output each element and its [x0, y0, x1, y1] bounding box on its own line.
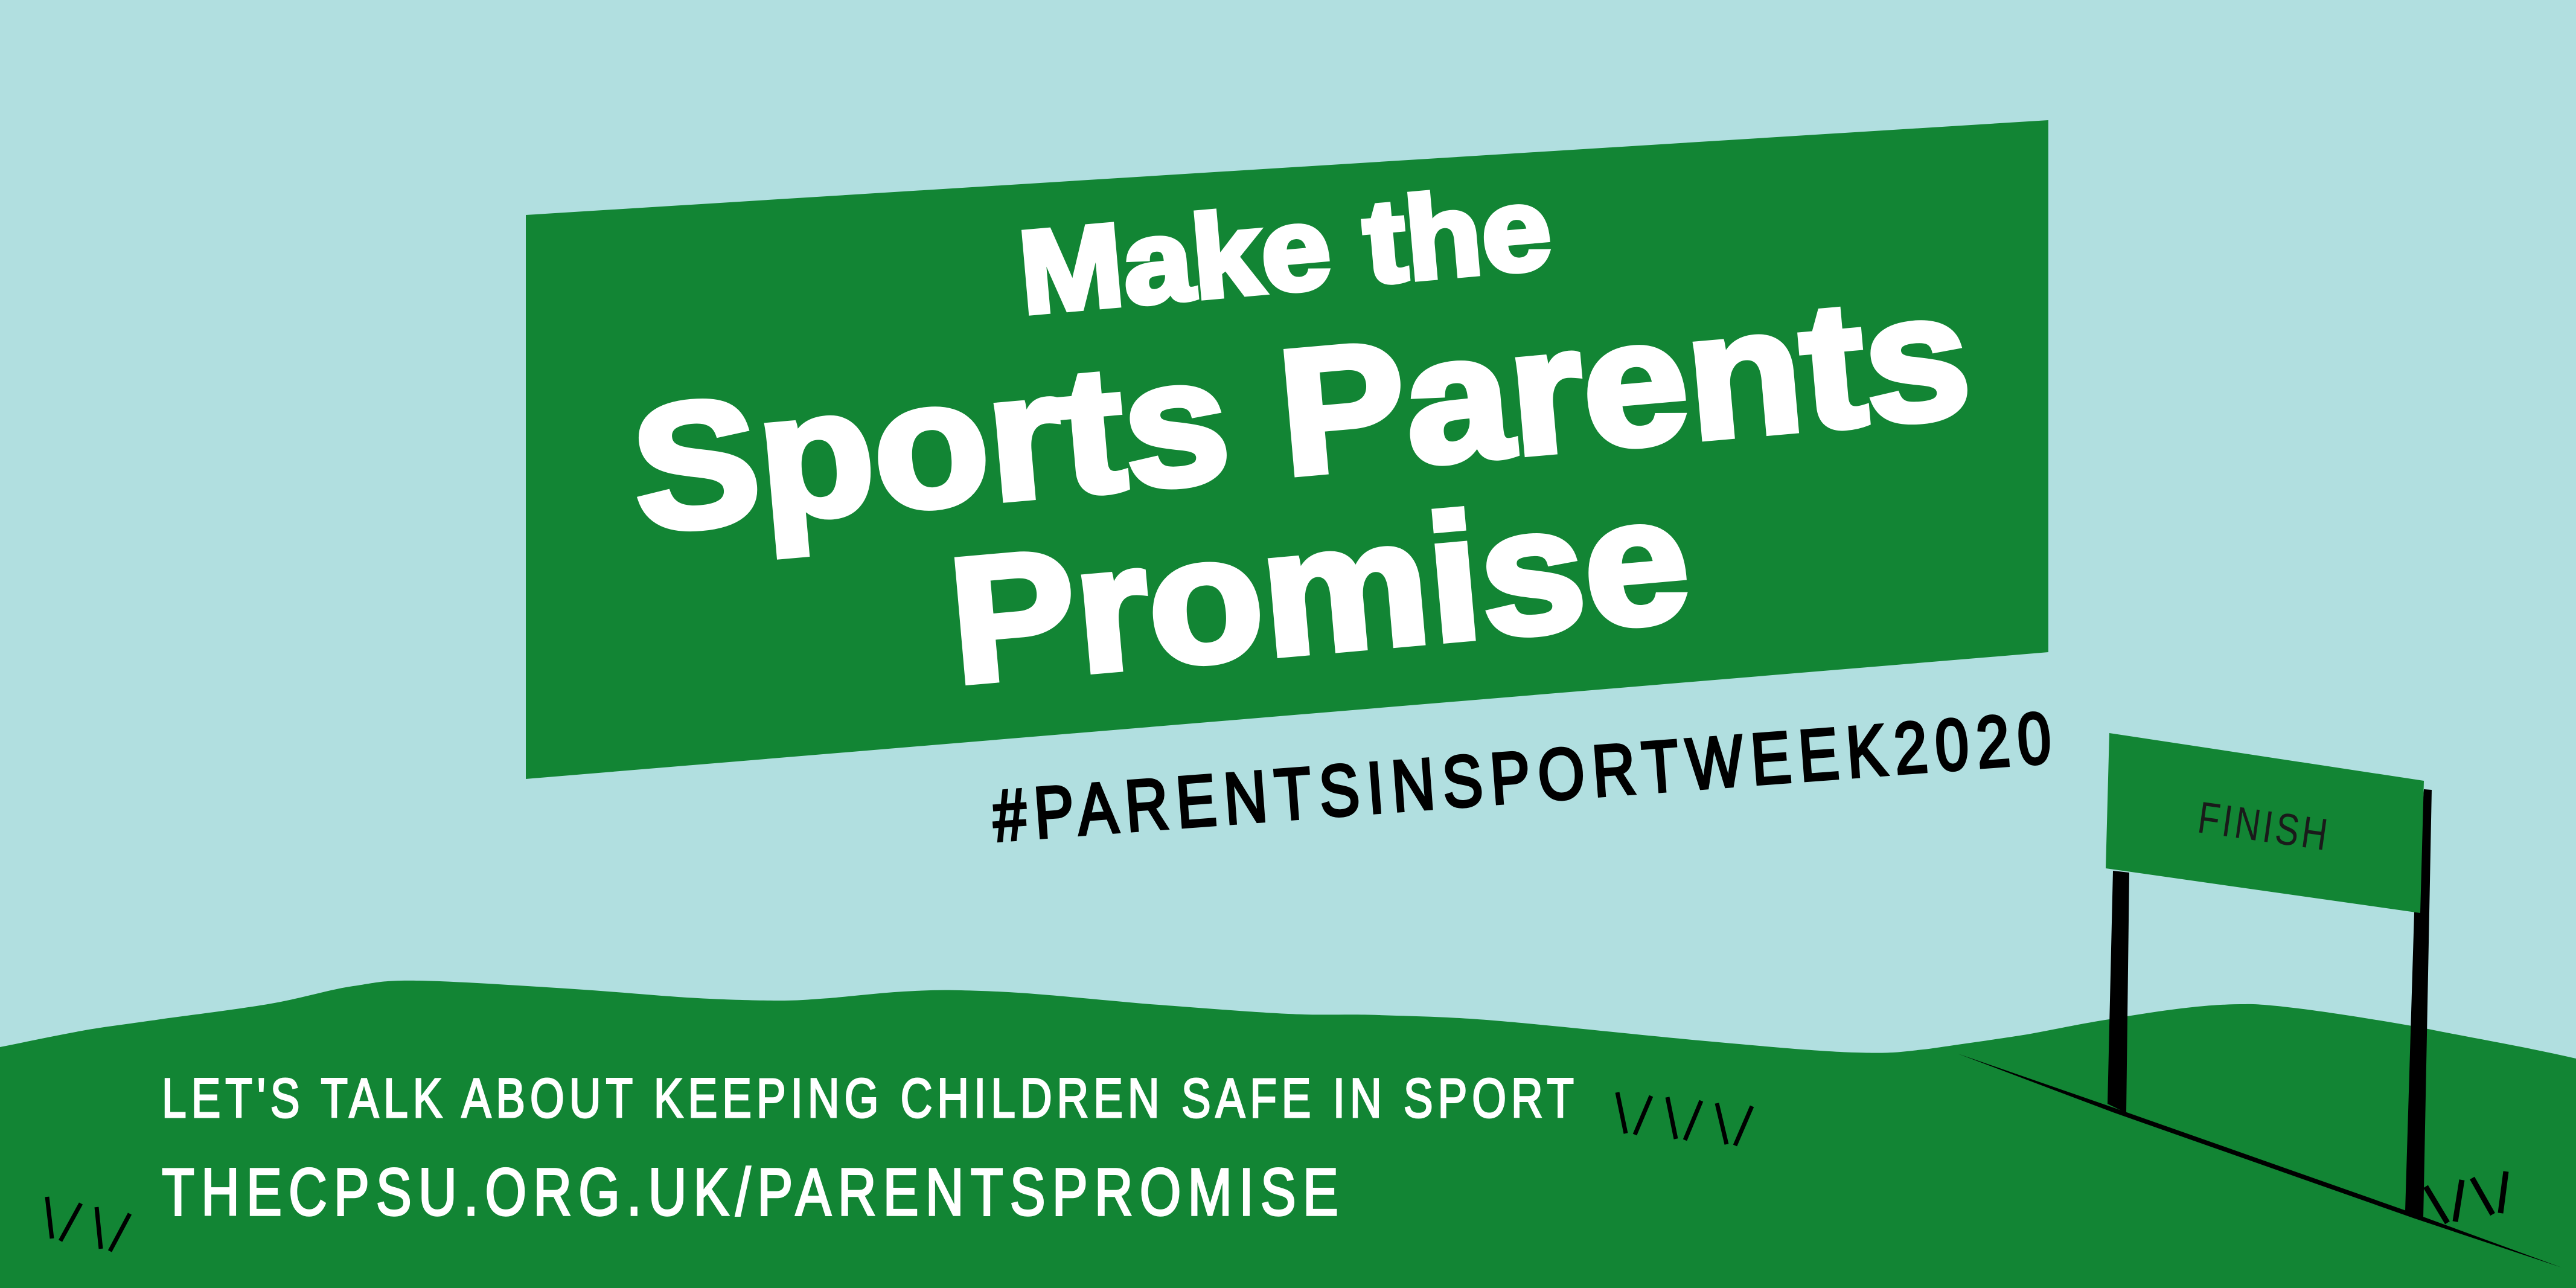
grass tufts by the finish post	[2426, 1171, 2506, 1223]
grass tufts centre	[1617, 1092, 1752, 1145]
finish line on the ground	[1958, 1054, 2562, 1267]
finish gate	[2106, 733, 2432, 1219]
hashtag: #PARENTSINSPORTWEEK2020	[990, 697, 2062, 857]
left post	[2108, 871, 2129, 1113]
grass tufts left	[47, 1197, 130, 1251]
title	[625, 162, 1977, 721]
tagline: LET'S TALK ABOUT KEEPING CHILDREN SAFE IN SPORT	[162, 1068, 1579, 1129]
finish sign label: FINISH	[2195, 792, 2333, 860]
green hill ground	[0, 981, 2576, 1288]
right post	[2405, 789, 2432, 1219]
title line: Make the: Make the	[1014, 162, 1556, 339]
main green banner	[526, 120, 2048, 779]
website address: THECPSU.ORG.UK/PARENTSPROMISE	[162, 1155, 1345, 1229]
title line: Sports Parents: Sports Parents	[625, 255, 1977, 570]
finish sign board	[2106, 733, 2424, 913]
title line: Promise: Promise	[942, 459, 1696, 721]
